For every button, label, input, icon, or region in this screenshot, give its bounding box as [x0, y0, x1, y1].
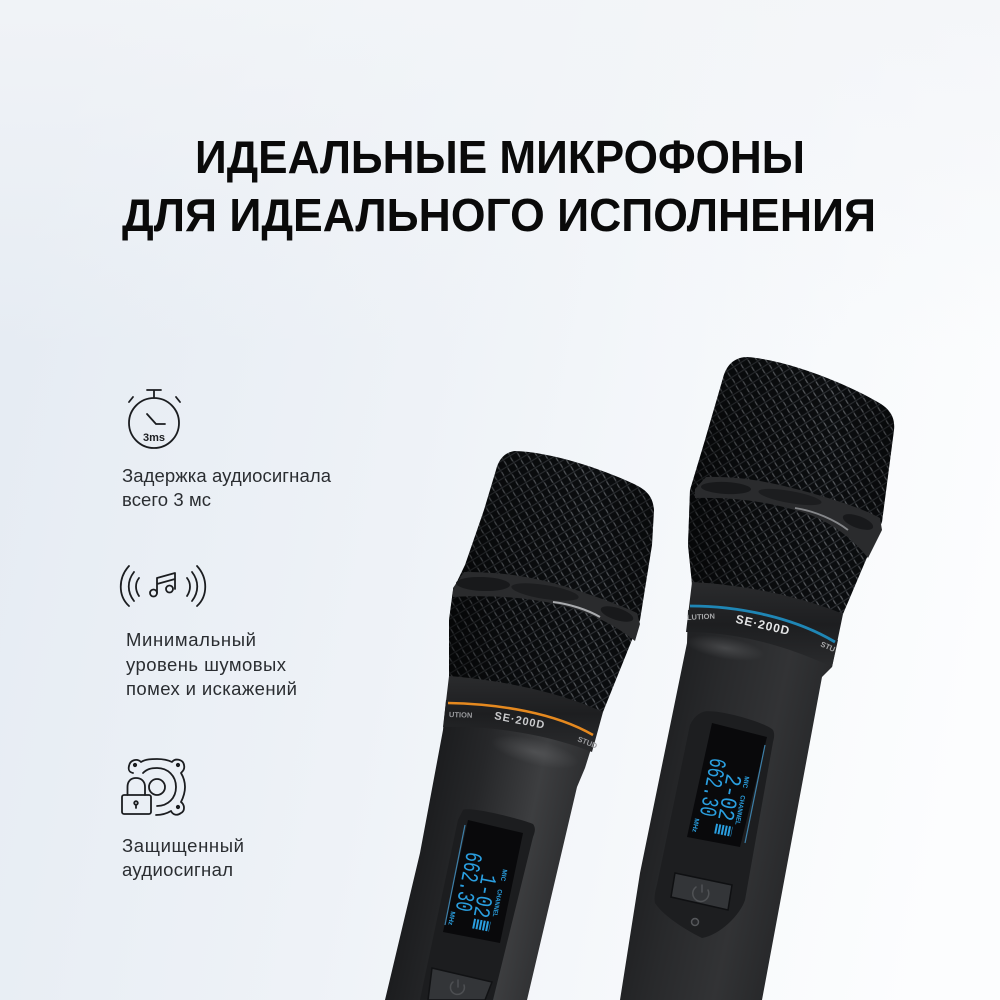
grille: [449, 451, 654, 712]
feature: low latency: [122, 390, 332, 510]
text: latency: всего 3 мс: [122, 489, 211, 510]
orange ring: [448, 703, 593, 735]
model label: SE·200D: [493, 710, 546, 732]
text: noise: [126, 629, 297, 699]
grille: [688, 357, 894, 614]
feature: low noise: [121, 566, 297, 699]
display: 1-02: [467, 872, 501, 920]
display: CHANNEL: [491, 889, 503, 917]
display: [687, 723, 767, 847]
model label: LUTION: [687, 612, 715, 622]
icon: stopwatch: [129, 390, 180, 448]
collar: [443, 676, 603, 752]
model label: [687, 612, 837, 654]
display: MIC: [741, 776, 750, 789]
model label: STUD: [576, 735, 599, 751]
text: protected: [122, 835, 244, 880]
handle: [385, 700, 596, 1000]
collar: [686, 582, 843, 667]
display: MIC: [499, 869, 508, 882]
handle sheen: [488, 728, 582, 776]
display housing: [655, 711, 774, 938]
display: [443, 820, 523, 943]
model label: [449, 710, 599, 751]
display: 662.30: [448, 849, 486, 914]
text: protected: Защищенный: [122, 835, 244, 856]
handle: [620, 610, 838, 1000]
title: ДЛЯ ИДЕАЛЬНОГО ИСПОЛНЕНИЯ: [122, 189, 876, 241]
grille band: [453, 572, 640, 641]
microphone: left with orange ring: [385, 451, 654, 1000]
handle sheen: [684, 630, 766, 666]
display: 2-02: [711, 772, 746, 823]
model label: STU: [819, 640, 837, 654]
title: ИДЕАЛЬНЫЕ МИКРОФОНЫ: [195, 131, 805, 183]
power button: [428, 968, 492, 1000]
model label: SE·200D: [734, 612, 792, 638]
text: noise: Минимальный: [126, 629, 256, 650]
text: latency: [122, 465, 332, 510]
feature: protected signal: [122, 759, 244, 880]
title: [122, 131, 876, 241]
display: 662.30: [692, 755, 730, 819]
microphone: right with blue ring: [620, 357, 894, 1000]
icon: music note with sound waves: [121, 566, 205, 606]
display: CHANNEL: [733, 795, 746, 825]
text: latency: Задержка аудиосигнала: [122, 465, 332, 486]
display: MHz: [690, 818, 700, 833]
model label: UTION: [449, 710, 473, 720]
blue ring: [690, 606, 835, 642]
icon: stopwatch: 3ms: [143, 432, 165, 444]
text: noise: уровень шумовых: [126, 654, 287, 675]
text: noise: помех и искажений: [126, 678, 297, 699]
display: MHz: [446, 911, 456, 926]
display housing: [420, 809, 535, 1000]
screw: [692, 918, 698, 926]
power button: [671, 873, 732, 910]
icon: speaker with lock: [122, 759, 185, 815]
grille band: [695, 477, 882, 558]
text: protected: аудиосигнал: [122, 859, 233, 880]
